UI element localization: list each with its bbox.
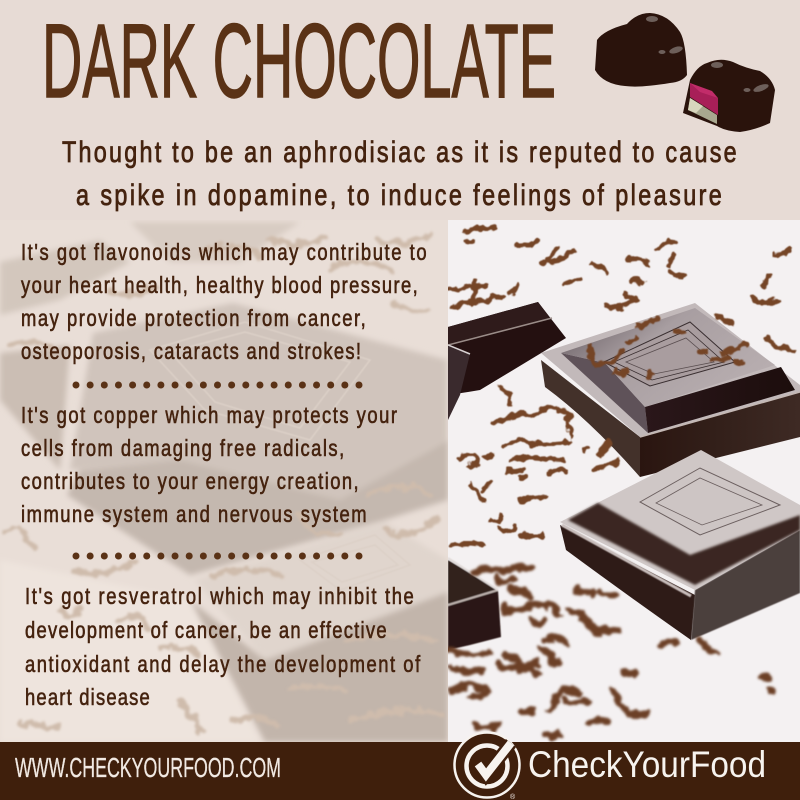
subtitle: Thought to be an aphrodisiac as it is reputed to cause <box>62 135 737 169</box>
divider: dotted line 1 <box>76 382 359 388</box>
text block: flavonoids: your heart health, healthy blood pressure, <box>21 273 418 299</box>
photo: dark chocolate pieces and shavings <box>448 220 800 742</box>
chocolate bar lower right <box>560 450 800 640</box>
footer brand name: CheckYourFood <box>528 744 766 785</box>
text block: copper: contributes to your energy creation, <box>21 469 359 495</box>
divider: dotted line 2 <box>76 552 359 560</box>
chocolate bar lower left <box>448 558 501 650</box>
chocolate bar centre right <box>541 303 800 477</box>
text block: resveratrol: antioxidant and delay the development of <box>25 652 420 678</box>
subtitle: a spike in dopamine, to induce feelings of pleasure <box>76 178 722 212</box>
chocolate bar upper left <box>448 302 566 420</box>
blurred shavings <box>448 568 771 735</box>
text block: copper: cells from damaging free radicals, <box>21 436 344 462</box>
icon: check logo <box>454 732 520 800</box>
text block: flavonoids: osteoporosis, cataracts and strokes! <box>21 339 361 365</box>
icon: chocolate pralines <box>595 13 775 132</box>
subtitle <box>62 135 737 212</box>
text block: resveratrol: development of cancer, be an effective <box>25 618 387 644</box>
text block: flavonoids: may provide protection from cancer, <box>21 306 366 332</box>
text block: flavonoids <box>21 240 427 365</box>
text block: resveratrol: heart disease <box>25 685 150 711</box>
footer website url: WWW.CHECKYOURFOOD.COM <box>15 752 281 783</box>
footer bar <box>0 742 800 800</box>
text block: resveratrol <box>25 584 420 711</box>
sharp shavings <box>450 228 794 545</box>
text block: copper: It's got copper which may protects your <box>21 403 397 429</box>
text block: flavonoids: It's got flavonoids which may contribute to <box>21 240 427 266</box>
panel: faded chocolate background <box>0 220 448 742</box>
text block: resveratrol: It's got resveratrol which may inhibit the <box>25 584 414 610</box>
text block: copper: immune system and nervous system <box>21 502 367 528</box>
text block: copper <box>21 403 397 528</box>
